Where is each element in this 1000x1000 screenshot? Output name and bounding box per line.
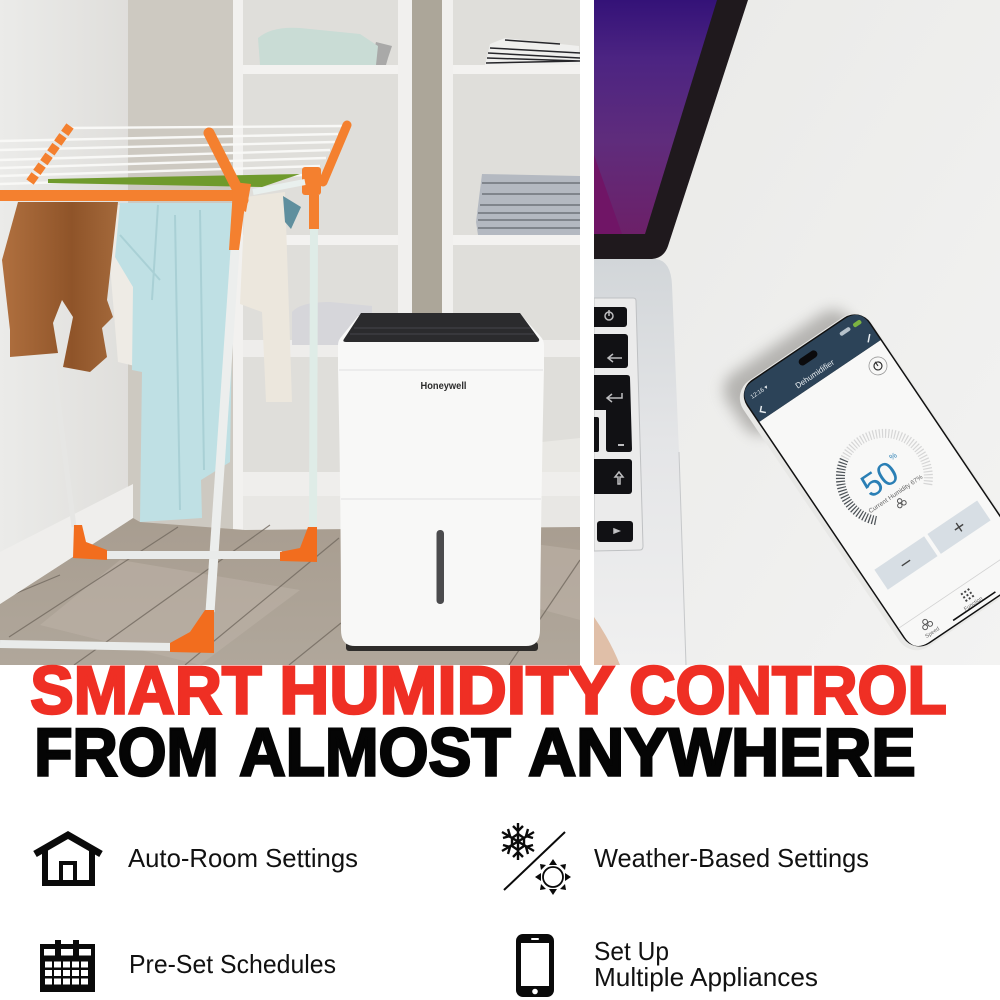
feature: pre-set schedules: Pre-Set Schedules <box>129 949 336 979</box>
time: 12:16 ▾ <box>750 385 770 401</box>
power button <box>865 353 890 378</box>
sun rays <box>535 859 571 895</box>
keys <box>590 307 633 542</box>
function label: Function <box>963 596 984 613</box>
icon: house <box>35 835 101 883</box>
snowflake <box>502 823 534 860</box>
feature: set up multiple appliances <box>594 936 818 992</box>
gauge fan icon <box>895 496 907 509</box>
panel: laptop and phone photo <box>590 0 1000 665</box>
heading line 1: SMART <box>30 653 262 729</box>
brown sweater <box>2 202 118 372</box>
drying rack back wires <box>0 126 342 184</box>
rack bottom bars <box>0 555 282 647</box>
heading line 2 <box>34 715 916 791</box>
plus glyph <box>952 520 966 534</box>
sun <box>543 867 563 887</box>
heading line 2: FROM <box>34 715 219 791</box>
seams <box>339 370 543 499</box>
laptop screen <box>594 0 717 234</box>
feature: set up multiple appliances: Multiple Appliances <box>594 962 818 992</box>
screen magenta accent <box>594 155 622 234</box>
back wall <box>128 0 238 535</box>
teal towel <box>115 203 234 522</box>
phone <box>716 293 1000 663</box>
rack orange frame <box>0 125 347 653</box>
top grille <box>343 313 539 342</box>
brand logo: Honeywell <box>420 381 467 392</box>
icon: calendar <box>40 940 95 992</box>
minus glyph <box>902 560 910 566</box>
gauge light ticks <box>823 416 938 528</box>
feature: set up multiple appliances: Set Up <box>594 936 669 966</box>
heading line 1: HUMIDITY <box>279 653 615 729</box>
rack left pole <box>210 250 235 612</box>
phone screen <box>759 340 1000 652</box>
rack green tray <box>48 174 300 187</box>
minus button <box>874 536 938 590</box>
current humidity label: Current Humidity 67% <box>868 474 924 515</box>
desk <box>654 0 1000 665</box>
icon: snowflake and sun <box>502 823 571 895</box>
icon: smartphone <box>516 934 554 997</box>
keyboard recess <box>594 298 643 551</box>
bookcase <box>233 0 580 530</box>
rack back orange bar <box>30 126 70 182</box>
back chevron <box>758 406 766 415</box>
app header <box>738 309 880 422</box>
floor <box>0 518 580 665</box>
feature: auto-room settings: Auto-Room Settings <box>128 843 358 873</box>
plus button <box>927 500 991 554</box>
rack white cross bar <box>253 182 305 192</box>
percent sign: % <box>888 451 899 462</box>
rack back pole <box>70 514 76 527</box>
heading line 1: CONTROL <box>629 653 947 729</box>
rack right pole <box>313 226 314 530</box>
nav divider <box>899 547 1000 628</box>
top grille lines <box>350 328 534 334</box>
folded blanket <box>292 302 372 345</box>
blue garment <box>283 196 301 229</box>
left wall <box>0 0 128 552</box>
humidity value: 50 <box>854 453 905 505</box>
off-white garment <box>110 205 133 366</box>
edit icon <box>865 334 873 342</box>
trackpad edge line <box>679 452 686 665</box>
home indicator <box>953 592 995 620</box>
dehumidifier <box>338 313 544 651</box>
laptop base <box>594 259 679 471</box>
heading line 2: ALMOST <box>239 715 511 791</box>
feature: weather-based settings: Weather-Based Settings <box>594 843 869 873</box>
phone shell <box>732 306 1000 658</box>
speed icon <box>919 617 933 631</box>
magazines <box>476 174 580 235</box>
panel: laundry room photo <box>0 0 580 665</box>
folded item right shelf <box>540 438 580 472</box>
heading line 2: ANYWHERE <box>528 715 916 791</box>
notch <box>797 349 819 367</box>
app title: Dehumidifier <box>794 358 836 390</box>
gauge dark ticks <box>827 458 884 528</box>
phone edge <box>736 307 1000 654</box>
towel folds <box>120 205 204 510</box>
folded towels <box>258 28 392 65</box>
body <box>338 316 544 646</box>
function grid icon <box>961 589 974 601</box>
floor shadow <box>346 642 538 651</box>
key glyphs <box>605 310 624 533</box>
laptop lid bezel <box>594 0 748 260</box>
heading line 1 <box>30 653 947 729</box>
hand edge <box>594 617 620 665</box>
water tank window <box>436 530 444 604</box>
phone shadow <box>716 302 878 443</box>
baseboard <box>0 484 133 604</box>
striped clothes <box>485 38 580 65</box>
status icons <box>839 319 862 337</box>
slash <box>504 832 565 890</box>
speed label: Speed <box>924 626 941 640</box>
cream cloth <box>240 192 292 402</box>
